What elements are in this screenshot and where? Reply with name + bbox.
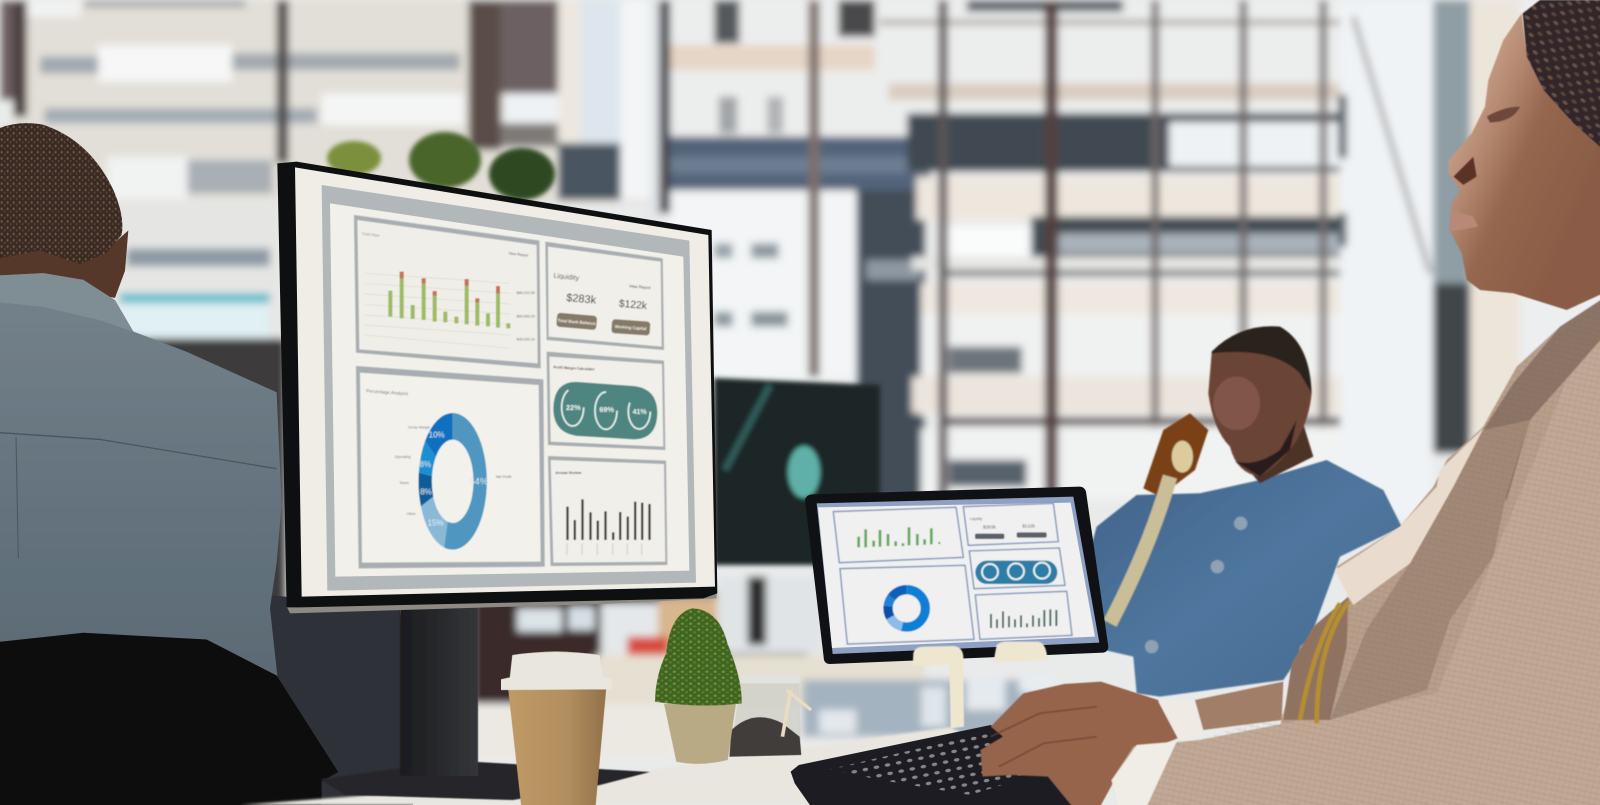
tablet card: donut: [840, 565, 974, 644]
lapel panel: [1330, 420, 1530, 720]
eye: [1487, 107, 1520, 123]
card: liquidity: $122k: [618, 299, 648, 312]
tablet bezel: [805, 487, 1108, 664]
card: cash flow bar chart: $40,030.10: [517, 338, 535, 342]
monitor screen: [295, 167, 715, 597]
office chair: [0, 633, 338, 805]
dark wall screen behind monitor: [714, 378, 880, 565]
blue man face: [1208, 328, 1312, 477]
lips: [1450, 210, 1478, 232]
green bars: [388, 272, 510, 328]
blue man beard: [1235, 420, 1297, 477]
lower left buildings: [113, 199, 287, 805]
card: profit margin gauges: 41%: [633, 409, 647, 416]
card: percentage analysis donut: Other: [407, 512, 417, 516]
tablet screen: [817, 497, 1099, 654]
braided hair: [1523, 0, 1600, 150]
card: cash flow bar chart: [354, 215, 541, 368]
central and right buildings: [650, 0, 1353, 500]
card: cash flow bar chart: Cash Flow: [362, 232, 380, 238]
tablet card: bars dark: [975, 591, 1072, 639]
man grey shirt: [0, 273, 282, 684]
total bank balance button: Total Bank Balance: [557, 318, 596, 326]
keyboard: [791, 725, 1100, 805]
man trousers: [263, 595, 413, 805]
blue shirt man on phone: [1087, 326, 1402, 697]
shirt yoke seam: [0, 433, 277, 559]
tablet card: liquidity: $122k: [1022, 523, 1036, 528]
tablet card: gauges: [969, 548, 1065, 589]
card: percentage analysis donut: 10%: [429, 430, 445, 439]
working capital button: Working Capital: [615, 324, 647, 331]
card: profit margin gauges: Profit Margin Calculator: [553, 365, 595, 372]
small potted plant: [655, 608, 742, 764]
card: percentage analysis donut: Gross Margin: [408, 426, 430, 430]
tablet card: liquidity: [963, 503, 1058, 545]
card: percentage analysis donut: [356, 366, 545, 568]
card: profit margin gauges: 69%: [599, 405, 614, 414]
card: percentage analysis donut: Net Profit: [496, 475, 511, 479]
card: annual review bars: [548, 456, 667, 566]
woman at right: [980, 0, 1600, 805]
dashboard frame: [322, 185, 696, 591]
blurred plants on window ledge: [327, 132, 555, 200]
shirt buttons: [1145, 517, 1247, 653]
woman head: [1448, 0, 1600, 310]
card: liquidity: $283k: [566, 292, 597, 307]
monitor underside strip: [287, 592, 717, 613]
upper white shirt cuff: [1158, 700, 1203, 739]
coffee cup: [501, 652, 612, 805]
card: percentage analysis donut: 8%: [420, 487, 432, 496]
card: cash flow bar chart: $80,101.50: [517, 291, 535, 295]
lower centre bokeh: [472, 577, 1056, 758]
desk surface: [240, 727, 1100, 805]
left buildings: [0, 0, 700, 203]
card: percentage analysis donut: 15%: [428, 518, 444, 527]
blue man hair: [1212, 326, 1312, 393]
blazer plaid lines: [1117, 298, 1600, 805]
man curly hair: [0, 123, 122, 264]
woman body: [1112, 298, 1600, 805]
card: percentage analysis donut: Percentage Analysis: [366, 388, 409, 396]
tablet card: liquidity: $283k: [983, 525, 996, 530]
man neck and ear: [0, 230, 128, 298]
white blouse: [1335, 428, 1483, 605]
gold necklace: [1300, 602, 1348, 723]
woman hands: [980, 682, 1178, 805]
blazer collar shadow: [1330, 298, 1600, 720]
card: liquidity: [545, 242, 664, 350]
donut chart: [425, 426, 480, 536]
card: percentage analysis donut: 54%: [469, 476, 488, 486]
desk items: [501, 608, 811, 805]
monitor stand: [320, 598, 650, 800]
desktop monitor with financial dashboard: [277, 162, 717, 613]
telephone handset: [1172, 441, 1193, 473]
nostril: [1453, 157, 1477, 185]
tablet card: bars: [833, 507, 963, 563]
seated man at left in grey shirt: [0, 123, 413, 805]
shirt collar: [0, 273, 133, 332]
far right window: [1338, 0, 1600, 520]
blue man neck: [1240, 413, 1313, 483]
card: percentage analysis donut: Operating: [395, 455, 411, 459]
card: cash flow bar chart: $60,050.20: [517, 314, 535, 318]
blazer inner plaid panel: [1283, 597, 1348, 720]
woman blazer cuff: [1195, 682, 1283, 730]
monitor bezel: [277, 162, 717, 607]
tablet card: liquidity: Liquidity: [970, 517, 983, 521]
card: liquidity: View Report: [629, 283, 652, 290]
card: profit margin gauges: [547, 352, 665, 450]
lower white shirt cuff: [1112, 742, 1177, 805]
phone cord: [1110, 477, 1170, 623]
blue man hand: [1143, 413, 1208, 497]
card: liquidity: Liquidity: [553, 273, 580, 282]
card: annual review bars: Annual Review: [555, 471, 581, 475]
red bar caps: [400, 272, 500, 302]
gauge pill: [553, 382, 657, 439]
sleeve highlights: [1120, 337, 1600, 805]
tablet with financial dashboard: [805, 487, 1108, 728]
blue man shirt: [1087, 460, 1402, 697]
card: cash flow bar chart: View Report: [508, 251, 528, 258]
card: profit margin gauges: 22%: [566, 403, 581, 412]
tan plaid blazer: [1112, 298, 1600, 805]
glass jar: [729, 675, 811, 757]
face: [1448, 13, 1600, 310]
tablet stand: [913, 642, 1047, 728]
card: percentage analysis donut: Taxes: [399, 481, 409, 485]
card: percentage analysis donut: 8%: [420, 460, 431, 469]
